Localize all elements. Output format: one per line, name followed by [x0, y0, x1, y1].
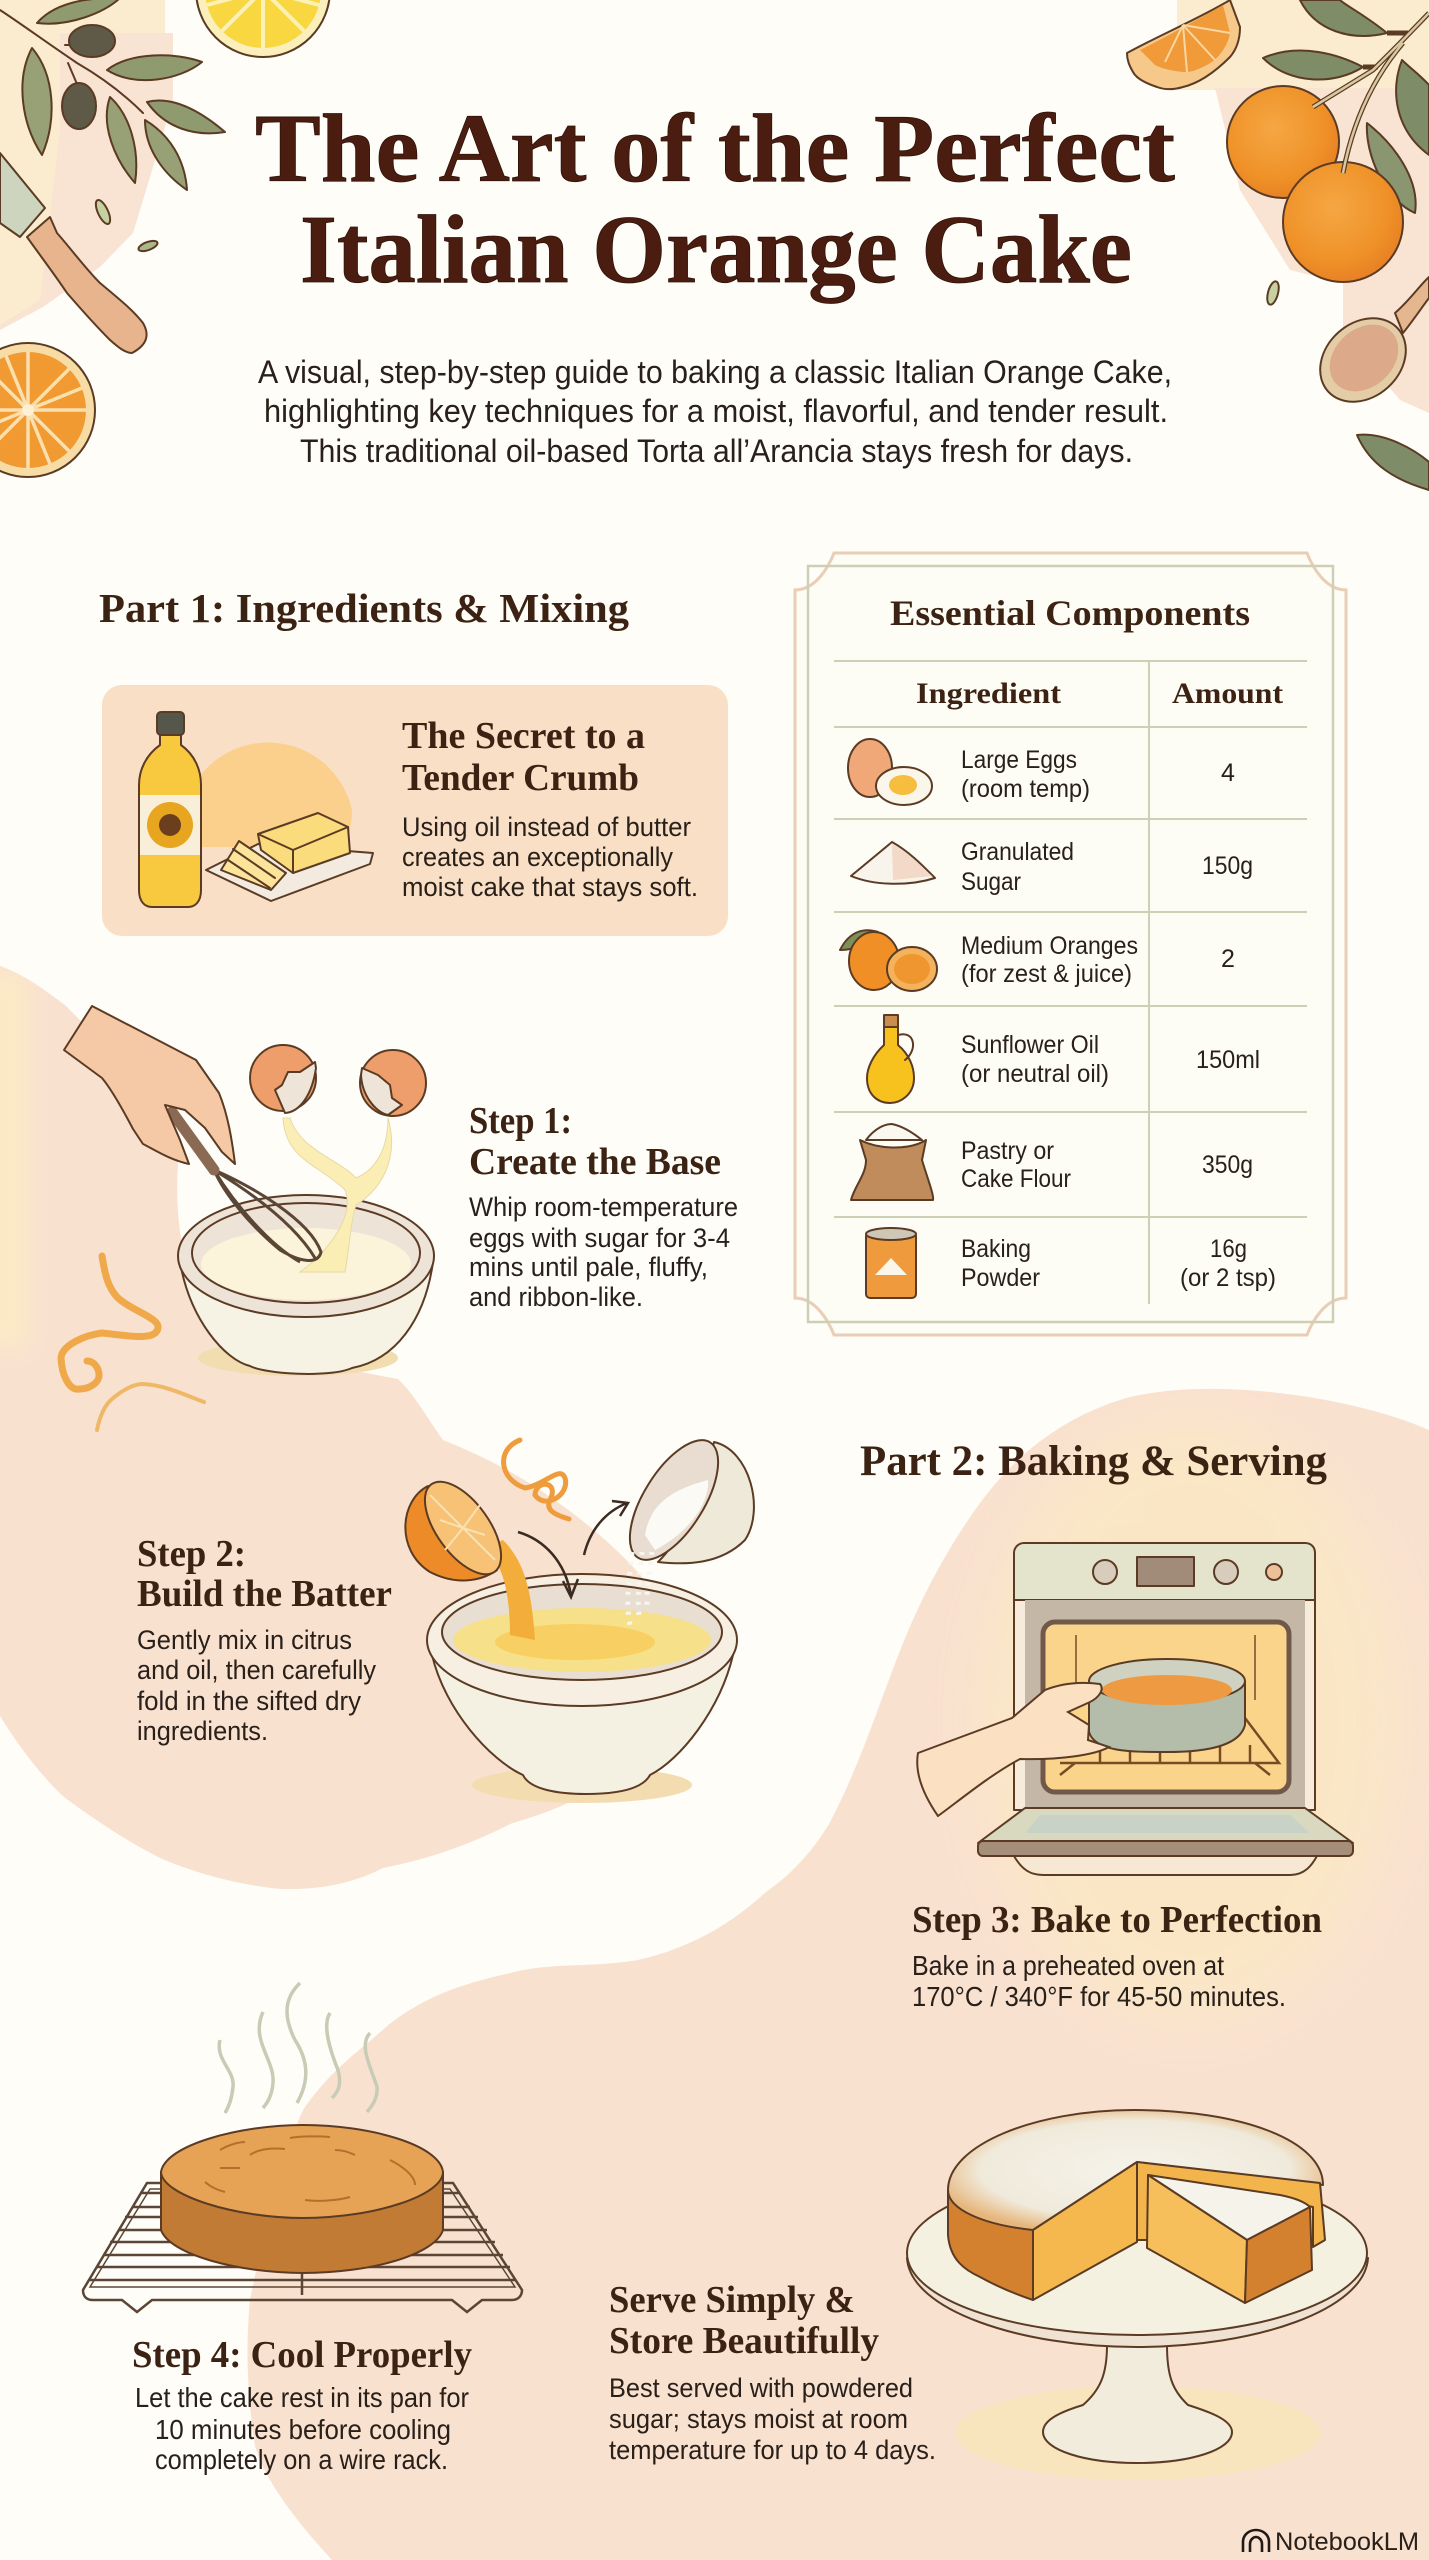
- row: flour sack: Cake Flour: [961, 1165, 1071, 1193]
- icon: sun circle backdrop: [182, 742, 352, 847]
- icon: orange branch top right: [1227, 0, 1429, 306]
- text: tender crumb: Tender Crumb: [402, 757, 639, 799]
- text: step 2: and oil, then carefully: [137, 1655, 376, 1685]
- row: sunflower oil: [867, 1015, 1260, 1103]
- text: serve and store: Store Beautifully: [609, 2320, 879, 2362]
- oven body: [1014, 1600, 1315, 1810]
- text: serve and store: sugar; stays moist at room: [609, 2404, 908, 2434]
- text: tender crumb: The Secret to a: [402, 715, 645, 757]
- bowl body: [432, 1655, 733, 1794]
- arrow down: [518, 1532, 578, 1597]
- steam lines: [219, 1983, 377, 2113]
- text: step 3: [912, 1899, 1322, 2012]
- text: serve and store: [609, 2279, 936, 2465]
- row: baking powder: Baking: [961, 1235, 1031, 1263]
- text: step 2: Build the Batter: [137, 1573, 392, 1615]
- row: oranges: [840, 930, 1235, 991]
- stand shadow: [955, 2386, 1321, 2480]
- illustration: cake on a stand: [907, 2110, 1368, 2480]
- row: oranges: 2: [1221, 945, 1235, 973]
- icon: leaf lower right: [1357, 435, 1429, 490]
- cake pan: [1089, 1659, 1245, 1752]
- falling flour: [628, 1552, 652, 1625]
- heading: part 1: Part 1: Ingredients & Mixing: [99, 585, 630, 631]
- oven rack: [1060, 1714, 1279, 1775]
- background blob: lower right peach wave: [248, 1389, 1429, 2560]
- wire rack: [83, 2183, 522, 2312]
- text: serve and store: Best served with powdered: [609, 2373, 913, 2403]
- text: step 1: and ribbon-like.: [469, 1282, 643, 1312]
- oven knobs and display: [1093, 1557, 1282, 1586]
- orange half: [405, 1469, 516, 1587]
- icon: butter on a dish: [206, 813, 373, 901]
- row: baking powder: Powder: [961, 1264, 1040, 1292]
- hand: [64, 1006, 235, 1164]
- text: step 3: 170°C / 340°F for 45-50 minutes.: [912, 1981, 1286, 2012]
- row: baking powder: (or 2 tsp): [1180, 1264, 1276, 1292]
- text: serve and store: temperature for up to 4 days.: [609, 2435, 936, 2465]
- oven window: [1043, 1622, 1289, 1792]
- table column headers: Ingredient: [916, 677, 1061, 710]
- stand base: [1043, 2345, 1232, 2463]
- text: step 4: Step 4: Cool Properly: [132, 2334, 472, 2376]
- row: sugar: [851, 838, 1253, 896]
- panel: essential components table: [795, 553, 1346, 1335]
- text: step 3: Step 3: Bake to Perfection: [912, 1899, 1322, 1941]
- title: Italian Orange Cake: [300, 196, 1132, 304]
- row: eggs: [848, 739, 1235, 805]
- row: sugar: Granulated: [961, 838, 1074, 866]
- bowl shadow: [198, 1340, 398, 1376]
- text: step 4: 10 minutes before cooling: [155, 2414, 451, 2445]
- row: baking powder: [866, 1228, 1276, 1298]
- panel: secret to a tender crumb: [102, 685, 728, 936]
- row: sunflower oil: (or neutral oil): [961, 1060, 1109, 1088]
- juice stream: [485, 1540, 535, 1640]
- subtitle: A visual, step-by-step guide to baking a classic Italian Orange Cake,: [258, 354, 1172, 390]
- background corner wash: top right: [1177, 0, 1429, 413]
- table title: Essential Components: [890, 593, 1250, 633]
- egg shells: [250, 1045, 426, 1116]
- batter: [453, 1608, 711, 1672]
- slice cut face: [1147, 2175, 1247, 2303]
- text: serve and store: Serve Simply &: [609, 2279, 855, 2321]
- text: step 2: Step 2:: [137, 1533, 246, 1575]
- text: step 4: [132, 2334, 472, 2475]
- cake top with powdered sugar: [948, 2110, 1323, 2230]
- background tint: left wave warm edge: [0, 980, 20, 1340]
- whisk: [172, 1112, 321, 1262]
- row: sugar: 150g: [1202, 852, 1253, 880]
- zest spiral: [504, 1440, 569, 1519]
- egg stream: [283, 1118, 392, 1272]
- row: sunflower oil: 150ml: [1196, 1046, 1260, 1074]
- icon: orange slice left: [0, 343, 95, 477]
- illustration: step 2 mixing batter: [405, 1426, 754, 1803]
- slice crust: [1245, 2207, 1312, 2303]
- text: tender crumb: [402, 715, 698, 902]
- icon: lemon slice top: [196, 0, 330, 57]
- text: step 4: completely on a wire rack.: [155, 2444, 448, 2475]
- table column headers: Amount: [1172, 677, 1283, 710]
- row: eggs: 4: [1221, 759, 1235, 787]
- text: tender crumb: creates an exceptionally: [402, 842, 673, 872]
- cake left crust: [948, 2190, 1033, 2300]
- text: step 1: eggs with sugar for 3-4: [469, 1223, 730, 1253]
- bowl body: [180, 1262, 433, 1374]
- oven handle: [1014, 1856, 1317, 1875]
- row: eggs: Large Eggs: [961, 746, 1077, 774]
- illustration: step 3 oven: [917, 1543, 1353, 1875]
- stand plate: [907, 2258, 1368, 2347]
- text: step 2: Gently mix in citrus: [137, 1625, 352, 1655]
- table column headers: [916, 677, 1283, 710]
- icon: orange wedge top right: [1127, 0, 1240, 89]
- text: step 3: Bake in a preheated oven at: [912, 1950, 1224, 1981]
- text: step 1: Create the Base: [469, 1141, 721, 1183]
- subtitle: highlighting key techniques for a moist, flavorful, and tender result.: [264, 393, 1168, 429]
- icon: kitchen knife with wooden handle: [0, 153, 147, 353]
- back cut face: [1137, 2162, 1325, 2247]
- text: tender crumb: Using oil instead of butter: [402, 812, 691, 842]
- text: step 2: fold in the sifted dry: [137, 1686, 361, 1716]
- cake: [161, 2125, 443, 2273]
- title: The Art of the Perfect: [255, 95, 1175, 203]
- tilted flour bowl: [613, 1426, 754, 1574]
- illustration: step 4 cake on wire rack: [83, 1983, 522, 2312]
- heading: part 2: Part 2: Baking & Serving: [860, 1438, 1327, 1485]
- text: step 2: [137, 1533, 392, 1746]
- subtitle: [258, 354, 1172, 469]
- row: baking powder: 16g: [1210, 1235, 1247, 1263]
- bowl shadow: [472, 1767, 692, 1803]
- logo: NotebookLM: NotebookLM: [1275, 2528, 1419, 2556]
- text: step 1: Whip room-temperature: [469, 1192, 738, 1222]
- text: step 4: Let the cake rest in its pan for: [135, 2382, 469, 2413]
- background tint: warm cream behind oven: [1000, 1446, 1376, 1994]
- title: [255, 95, 1175, 304]
- zest curls: [61, 1256, 204, 1430]
- row: eggs: (room temp): [961, 775, 1090, 803]
- subtitle: This traditional oil-based Torta all’Arancia stays fresh for days.: [300, 433, 1133, 469]
- slice top: [1148, 2175, 1310, 2240]
- olive branch: top left: [0, 0, 225, 253]
- text: step 1: [469, 1100, 738, 1312]
- text: step 2: ingredients.: [137, 1716, 268, 1746]
- text: tender crumb: moist cake that stays soft.: [402, 872, 698, 902]
- row: oranges: (for zest & juice): [961, 960, 1132, 988]
- row: oranges: Medium Oranges: [961, 932, 1138, 960]
- icon: sunflower oil bottle: [139, 712, 201, 907]
- arrow up: [584, 1501, 628, 1555]
- row: sugar: Sugar: [961, 868, 1021, 896]
- oven door: [978, 1808, 1353, 1843]
- left cut face: [1033, 2162, 1137, 2300]
- row: flour sack: 350g: [1202, 1151, 1253, 1179]
- background corner wash: top left: [0, 0, 173, 330]
- background blob: left peach wave: [0, 966, 690, 1889]
- table grid: [834, 661, 1307, 1304]
- text: step 1: Step 1:: [469, 1100, 572, 1142]
- arm reaching into oven: [917, 1683, 1109, 1816]
- row: flour sack: Pastry or: [961, 1137, 1054, 1165]
- row: flour sack: [851, 1124, 1253, 1200]
- icon: wooden spoon right: [1303, 277, 1429, 419]
- oven control panel: [1014, 1543, 1315, 1600]
- illustration: step 1 whisking eggs: [61, 1006, 434, 1430]
- text: step 1: mins until pale, fluffy,: [469, 1252, 708, 1282]
- row: sunflower oil: Sunflower Oil: [961, 1031, 1099, 1059]
